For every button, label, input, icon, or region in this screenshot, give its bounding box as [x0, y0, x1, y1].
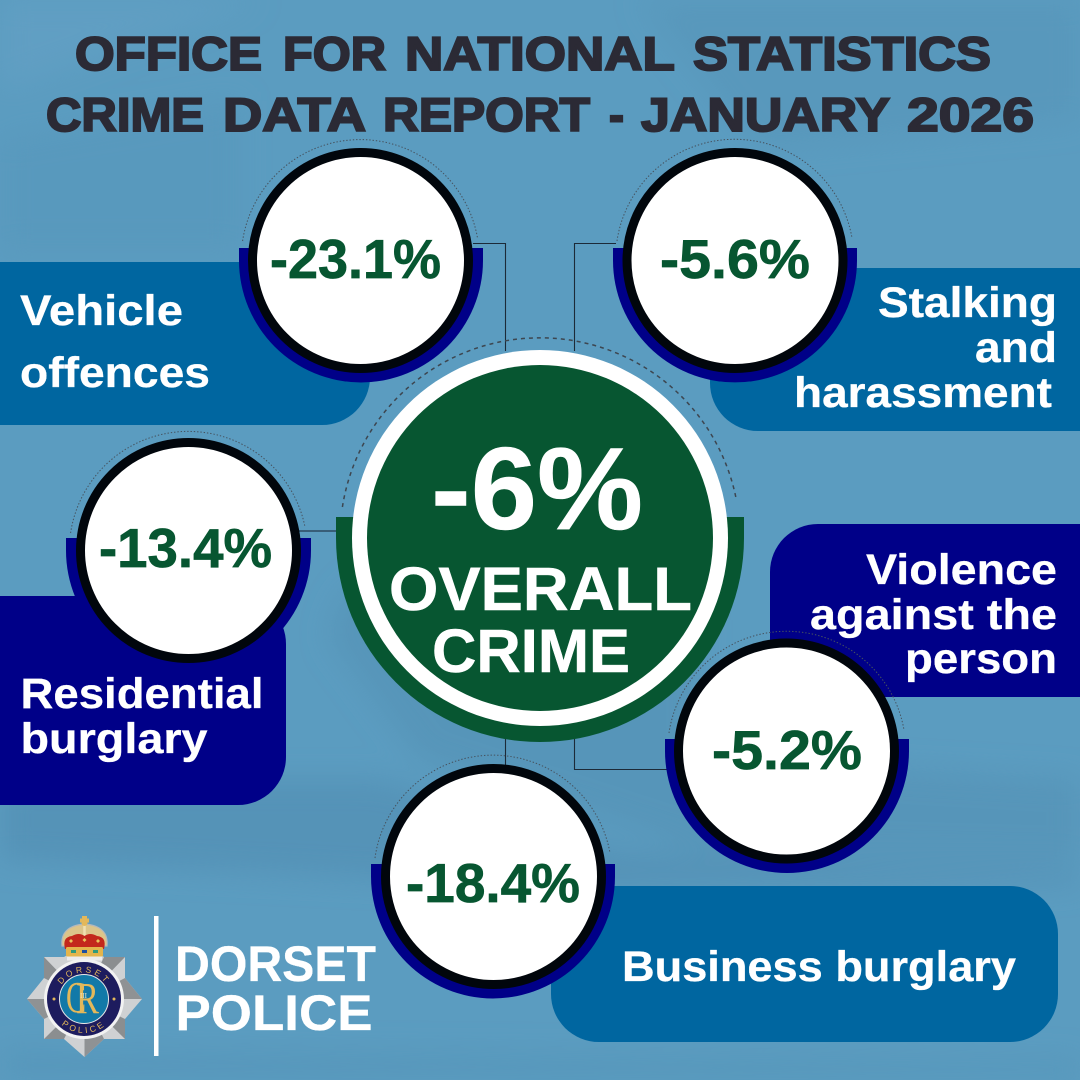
title [46, 28, 1034, 142]
panel: vehicle offences: offences [20, 349, 210, 397]
star [27, 945, 142, 1057]
logo wordmark [175, 936, 376, 1041]
panel: business burglary [551, 886, 1058, 1042]
central badge: overall crime [336, 338, 744, 742]
crown [62, 916, 107, 960]
stat circle: vehicle offences [239, 140, 483, 382]
central badge: overall crime: -6% [431, 423, 643, 554]
logo divider [154, 916, 158, 1056]
title: JANUARY [641, 89, 889, 142]
title: CRIME [46, 89, 204, 142]
panel: violence against the person: person [905, 635, 1057, 683]
stat circle: violence against the person [665, 631, 909, 873]
panel: residential burglary [0, 596, 286, 805]
panel: violence against the person: Violence [866, 546, 1057, 594]
panel: business burglary: Business burglary [622, 943, 1016, 991]
central badge: overall crime: OVERALL [389, 555, 692, 623]
title: STATISTICS [693, 28, 991, 81]
logo wordmark: POLICE [176, 985, 372, 1041]
stat circle: business burglary: -18.4% [406, 852, 580, 914]
stat circle: vehicle offences: -23.1% [270, 228, 441, 290]
badge ring: DORSET [57, 966, 110, 984]
stat circle: business burglary [371, 755, 615, 998]
stat circle: stalking and harassment: -5.6% [660, 228, 810, 290]
logo: dorset police crest [27, 916, 142, 1057]
logo wordmark: DORSET [175, 936, 376, 992]
panel: residential burglary: Residential [20, 670, 264, 718]
panel: violence against the person [770, 524, 1080, 697]
title: NATIONAL [405, 28, 674, 81]
panel: stalking and harassment: Stalking [878, 279, 1057, 327]
panel: vehicle offences [0, 262, 370, 425]
panel: vehicle offences: Vehicle [20, 287, 183, 335]
title: - [609, 89, 624, 142]
panel: stalking and harassment: and [975, 324, 1057, 372]
title: 2026 [907, 89, 1034, 142]
central badge: overall crime: CRIME [432, 617, 630, 685]
stat circle: residential burglary [66, 431, 311, 673]
connector lines [298, 244, 668, 770]
badge ring: R [76, 974, 100, 1023]
stat circle: violence against the person: -5.2% [712, 719, 862, 781]
badge ring: POLICE [62, 1020, 104, 1033]
panel: residential burglary: burglary [20, 715, 208, 763]
stat circle: residential burglary: -13.4% [99, 517, 272, 579]
panel: stalking and harassment [710, 268, 1080, 431]
title: REPORT [383, 89, 590, 142]
panel: violence against the person: against the [810, 591, 1057, 639]
stat circle: stalking and harassment [613, 139, 857, 382]
panel: stalking and harassment: harassment [794, 369, 1052, 417]
title: OFFICE [75, 28, 262, 81]
badge ring: C [66, 973, 86, 1022]
badge ring: III [80, 992, 88, 1000]
title: DATA [223, 89, 366, 142]
badge ring [44, 960, 124, 1039]
title: FOR [283, 28, 386, 81]
